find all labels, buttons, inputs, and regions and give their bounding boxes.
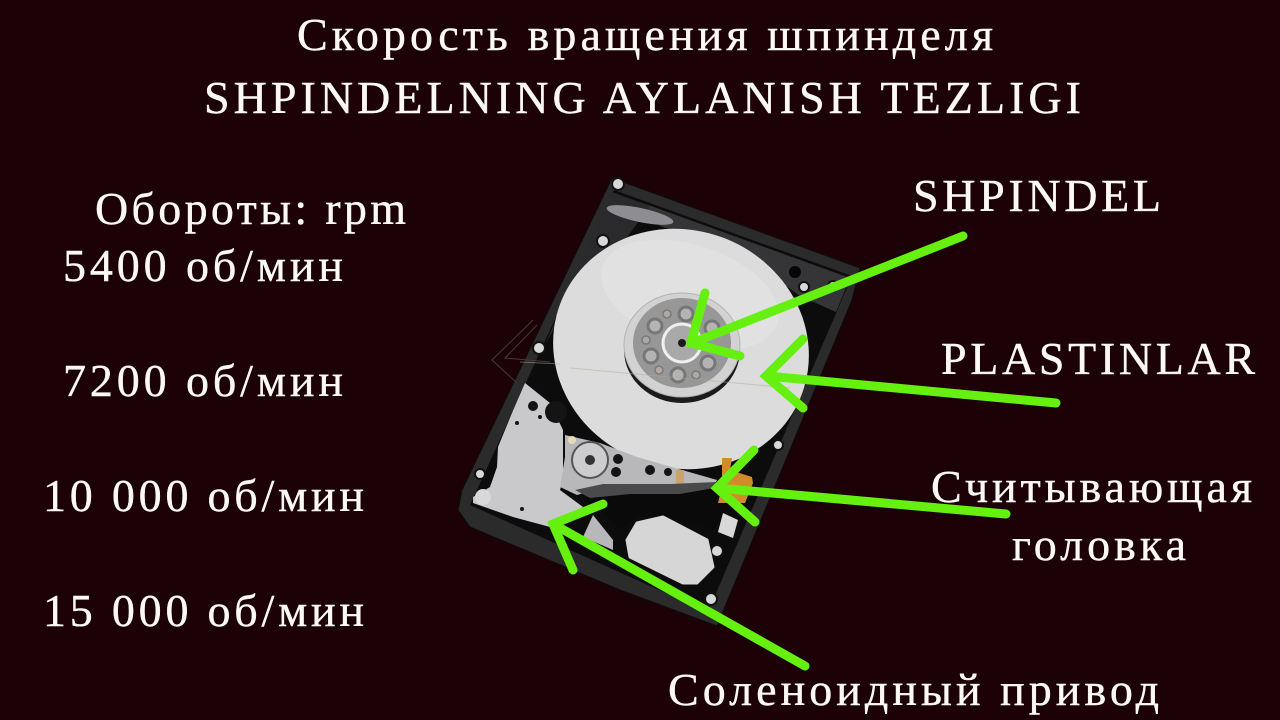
arrow: read head — [717, 450, 1006, 522]
platter — [519, 193, 843, 505]
casing screws — [475, 178, 838, 605]
faint outline arrow — [492, 320, 550, 383]
casing inner well — [470, 190, 852, 612]
label: spindle: SHPINDEL — [913, 170, 1161, 221]
label line: head: головка — [1012, 519, 1186, 570]
hard drive illustration — [458, 178, 860, 626]
casing top left panel — [545, 192, 650, 345]
speed 5400: 5400 об/мин — [63, 240, 343, 291]
flex cable tab — [718, 513, 738, 538]
speed 15000: 15 000 об/мин — [43, 585, 364, 636]
black cut-out under arm — [577, 487, 730, 530]
small bracket — [583, 515, 613, 550]
clamp small holes — [642, 310, 700, 379]
centre ring — [663, 324, 701, 362]
speed 10000: 10 000 об/мин — [43, 470, 364, 521]
title — [204, 9, 1081, 123]
actuator plate — [473, 383, 583, 527]
spindle shadow — [624, 297, 740, 403]
platter highlight — [587, 219, 793, 371]
spindle clamp — [633, 298, 731, 388]
arm and plate holes — [515, 401, 672, 511]
label: solenoid drive: Соленоидный привод — [668, 664, 1159, 715]
arrow: platters — [766, 339, 1056, 408]
dark casing hole — [789, 266, 801, 278]
label line: read: Считывающая — [931, 461, 1252, 512]
arrow: spindle — [691, 236, 963, 356]
voice coil plate — [627, 517, 713, 583]
actuator pivot centre — [585, 455, 595, 465]
arrow: solenoid drive — [553, 504, 805, 666]
speed list heading: Обороты: rpm — [95, 183, 406, 234]
ramp latch — [605, 201, 675, 229]
spindle outer hub — [624, 293, 740, 397]
arm stack — [575, 482, 716, 498]
plate corner — [475, 489, 491, 505]
clamp screws — [644, 307, 719, 382]
speed 7200: 7200 об/мин — [63, 355, 343, 406]
speed list — [43, 183, 406, 636]
centre axis — [678, 339, 686, 347]
orange flex connector — [718, 458, 753, 503]
label: read head — [931, 461, 1252, 570]
faint scan lines on platter — [520, 362, 790, 388]
drive casing — [458, 178, 860, 626]
label: platters: PLASTINLAR — [941, 333, 1255, 384]
title line: Russian: Скорость вращения шпинделя — [297, 9, 993, 60]
casing top right panel — [640, 202, 850, 312]
read head connector — [676, 470, 684, 484]
actuator arm — [560, 435, 717, 495]
pivot pin — [568, 436, 576, 444]
actuator pivot — [572, 442, 608, 478]
title line: Uzbek: SHPINDELNING AYLANISH TEZLIGI — [204, 72, 1081, 123]
